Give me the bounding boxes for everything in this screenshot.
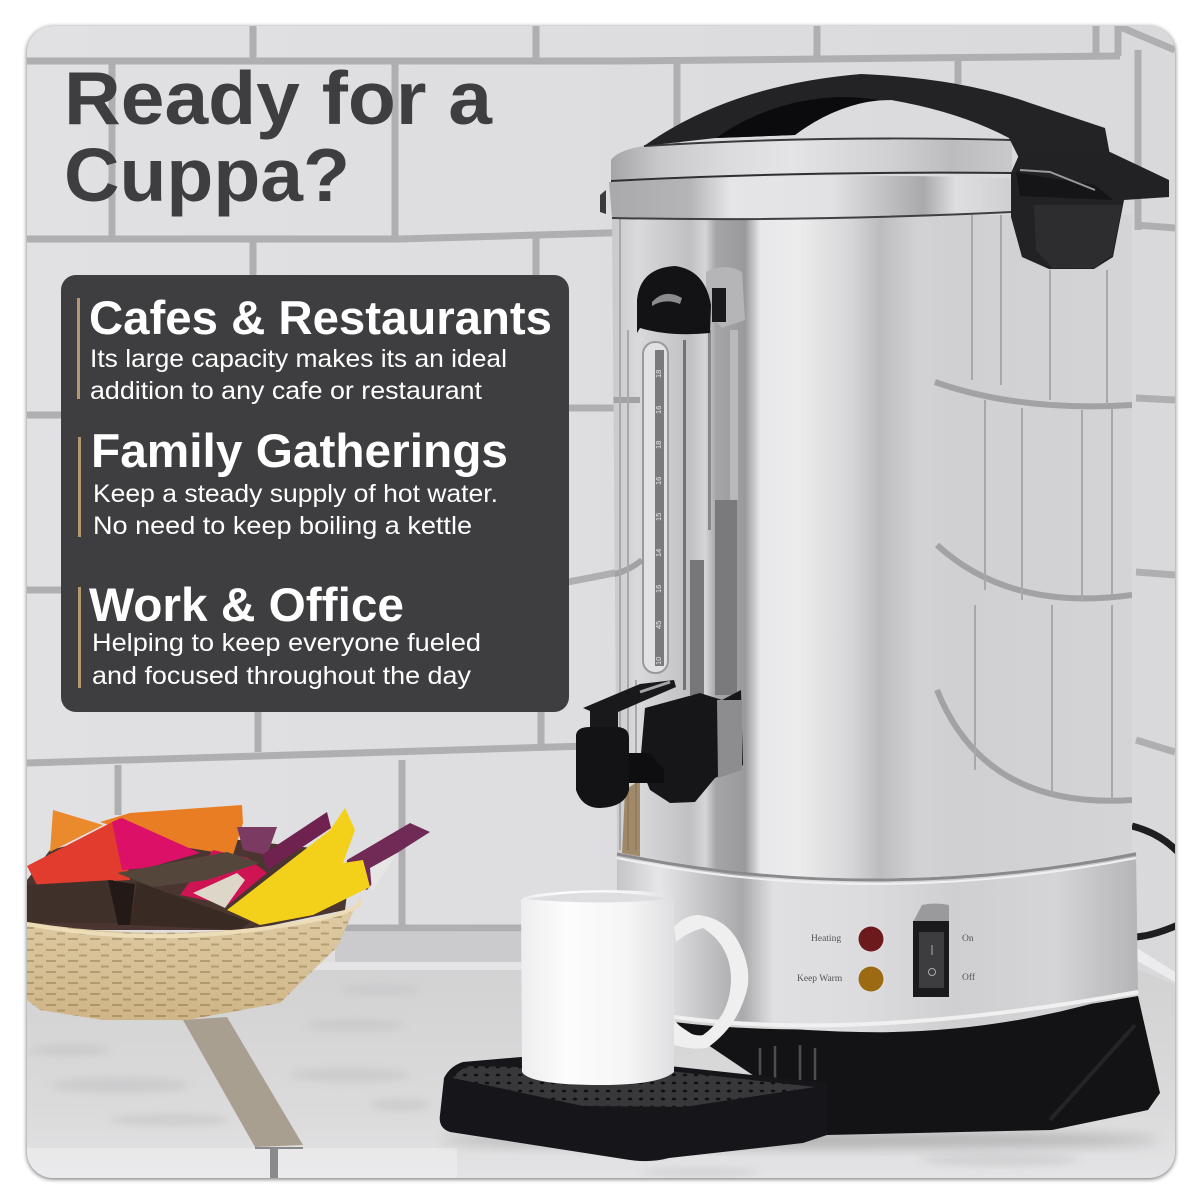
gauge cap <box>637 266 711 334</box>
section: cafes and restaurants: addition to any cafe or restaurant <box>90 377 482 405</box>
dark gauge reflection <box>690 560 704 695</box>
gauge numbers: 15 <box>654 513 663 521</box>
packet backing <box>27 840 346 930</box>
urn shadow <box>440 1132 1160 1148</box>
mug <box>521 890 748 1085</box>
black base <box>674 996 1160 1135</box>
section: work and office: and focused throughout the day <box>92 662 472 690</box>
gauge numbers: 10 <box>654 657 663 665</box>
marble counter <box>27 945 1175 1178</box>
handle clamp <box>1011 152 1169 269</box>
panel: uses <box>61 275 569 712</box>
purple packets <box>237 827 277 855</box>
gauge numbers: 18 <box>654 441 663 449</box>
gauge numbers: 18 <box>654 370 663 378</box>
lid lower band <box>609 176 1012 219</box>
reflection of snacks <box>622 780 640 858</box>
rocker switch <box>913 904 949 997</box>
steel body <box>612 215 1132 878</box>
indicator lights <box>858 926 884 992</box>
gauge tube <box>643 342 668 673</box>
red and pink packets <box>27 818 130 885</box>
orange packets <box>50 810 103 852</box>
steel skirt <box>617 852 1138 1032</box>
drip tray <box>440 1057 827 1161</box>
section: work and office: Helping to keep everyone fueled <box>92 629 481 657</box>
counter joint <box>183 1017 303 1178</box>
reflected tile lines <box>612 215 1132 858</box>
section: family gatherings <box>78 424 508 540</box>
control panel labels: On <box>962 934 974 944</box>
lid handle <box>644 74 1110 158</box>
control panel labels: Heating <box>811 934 841 944</box>
gauge numbers: 45 <box>654 621 663 629</box>
tiled wall <box>27 26 1175 986</box>
control panel labels: Keep Warm <box>797 974 843 984</box>
yellow packet <box>227 808 370 925</box>
section: family gatherings: Keep a steady supply of hot water. <box>93 480 498 508</box>
left latch <box>600 190 606 214</box>
control panel labels: Off <box>962 972 976 983</box>
gauge numbers: 16 <box>654 477 663 485</box>
gauge numbers: 16 <box>654 406 663 414</box>
power cord <box>1132 822 1175 940</box>
gauge numbers: 14 <box>654 549 663 557</box>
section: cafes and restaurants: Cafes & Restaurants <box>89 291 552 344</box>
gauge numbers <box>656 370 661 664</box>
section: cafes and restaurants: Its large capacity makes its an ideal <box>90 345 507 373</box>
control panel labels <box>797 934 976 984</box>
section: work and office <box>78 578 481 690</box>
section: cafes and restaurants <box>77 291 552 405</box>
title: Cuppa? <box>64 133 350 217</box>
section: family gatherings: Family Gatherings <box>91 424 508 477</box>
brown bars <box>117 852 260 887</box>
wicker basket <box>27 897 360 1020</box>
section: family gatherings: No need to keep boiling a kettle <box>93 512 472 540</box>
lid upper dome <box>611 139 1012 181</box>
title: Ready for a <box>64 56 493 140</box>
spigot <box>576 680 743 808</box>
gauge chrome mount <box>706 267 745 328</box>
snack basket <box>27 805 430 1020</box>
gauge numbers: 16 <box>654 585 663 593</box>
coffee urn <box>576 74 1178 1135</box>
title <box>64 56 493 217</box>
section: work and office: Work & Office <box>89 578 404 631</box>
